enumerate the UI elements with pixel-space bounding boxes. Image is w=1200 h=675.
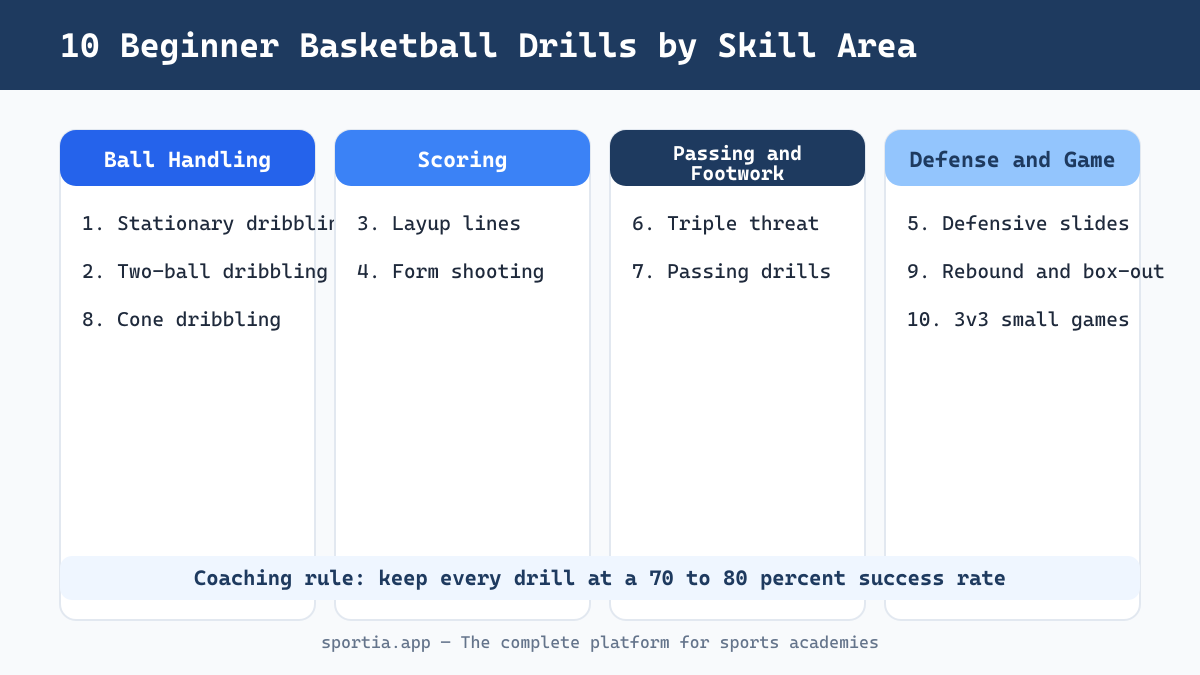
- drill 1: 1. Stationary dribbling: [82, 211, 352, 235]
- callout: coaching rule: [60, 556, 1140, 600]
- panel: Ball Handling: [59, 129, 316, 621]
- drill 5: 5. Defensive slides: [907, 211, 1130, 235]
- footer: sportia.app — The complete platform for sports academies: [321, 632, 879, 652]
- heading: Passing and Footwork: Passing and: [673, 141, 802, 165]
- drill 7: 7. Passing drills: [632, 259, 831, 283]
- heading: Defense and Game: [885, 130, 1140, 186]
- drill 10: 10. 3v3 small games: [907, 307, 1130, 331]
- heading: Passing and Footwork: [610, 130, 865, 186]
- drill 3: 3. Layup lines: [357, 211, 521, 235]
- drill 4: 4. Form shooting: [357, 259, 544, 283]
- panel: Scoring: [334, 129, 591, 621]
- header bar: [0, 0, 1200, 90]
- heading: Defense and Game: Defense and Game: [909, 148, 1116, 172]
- drill 8: 8. Cone dribbling: [82, 307, 281, 331]
- heading: Scoring: Scoring: [417, 148, 508, 172]
- heading: Scoring: [335, 130, 590, 186]
- panel: Defense and Game: [884, 129, 1141, 621]
- heading: Passing and Footwork: Footwork: [691, 161, 784, 185]
- callout: coaching rule: Coaching rule: keep every drill at a 70 to 80 percent success rate: [194, 566, 1006, 590]
- drill 2: 2. Two-ball dribbling: [82, 259, 328, 283]
- heading: Ball Handling: Ball Handling: [104, 148, 271, 172]
- drill 6: 6. Triple threat: [632, 211, 820, 235]
- panel: Passing and Footwork: [609, 129, 866, 621]
- heading: Ball Handling: [60, 130, 315, 186]
- drill 9: 9. Rebound and box-out: [907, 259, 1165, 283]
- title: 10 Beginner Basketball Drills by Skill Area: [60, 25, 917, 65]
